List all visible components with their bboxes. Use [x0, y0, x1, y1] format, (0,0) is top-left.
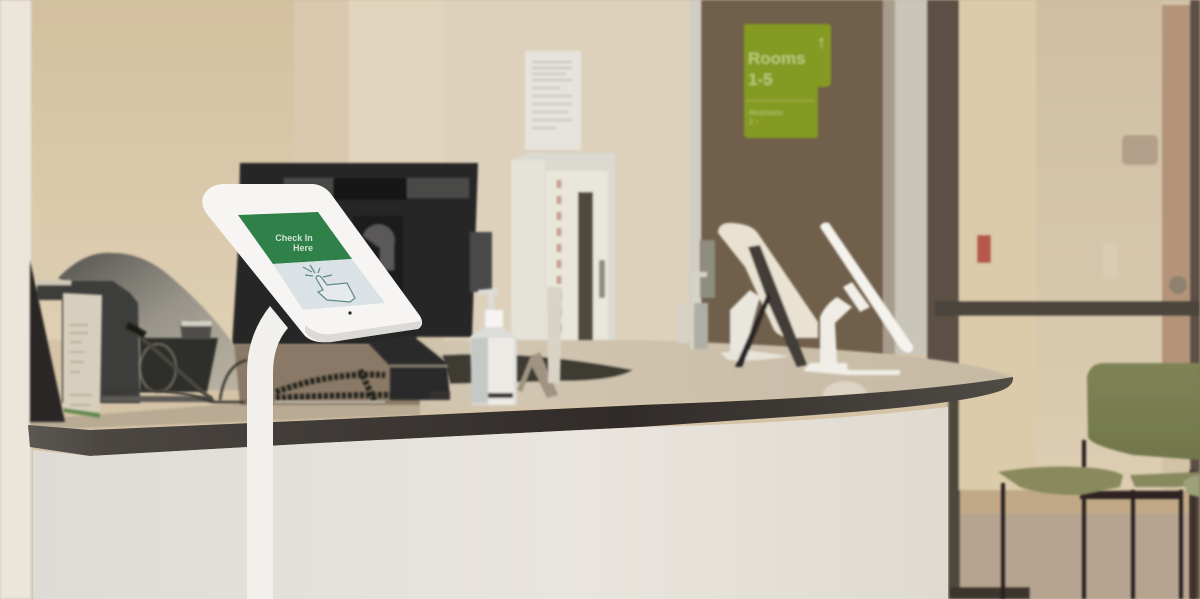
wall sign: Rooms 1-5: Restrooms	[749, 110, 783, 117]
rear kiosk tablet	[718, 223, 818, 338]
background kiosks	[718, 222, 913, 375]
kiosk body	[202, 184, 422, 342]
kiosk screen lower area	[273, 259, 385, 310]
hand tap icon	[303, 265, 355, 302]
brown door wall	[701, 0, 883, 355]
screen text: Check In	[275, 233, 313, 243]
fire extinguisher cabinet	[511, 153, 615, 347]
front kiosk mount	[843, 282, 870, 312]
right room wall	[959, 0, 1036, 490]
office chair back	[58, 253, 247, 390]
posted paper notice	[525, 51, 581, 150]
screen text	[275, 233, 313, 253]
green chair	[998, 363, 1200, 599]
kiosk stand	[247, 306, 288, 599]
screen text: Here	[293, 243, 313, 253]
kiosk camera dot	[348, 311, 352, 315]
front kiosk tablet	[820, 222, 913, 353]
wall sign: Rooms 1-5: 1-5	[748, 70, 773, 89]
clear acrylic sign holder	[547, 287, 562, 383]
small tent desk sign	[517, 352, 558, 398]
desk front panel	[33, 407, 948, 599]
second sanitizer in background	[678, 240, 715, 349]
wall sign: Rooms 1-5	[744, 24, 831, 138]
desk phone	[102, 320, 218, 402]
tangled cables	[103, 325, 392, 402]
wall sign: Rooms 1-5: ↑	[817, 32, 826, 52]
desk edge band	[28, 377, 1013, 456]
rear kiosk arm	[730, 290, 760, 353]
wall sign: Rooms 1-5: Rooms	[748, 49, 806, 68]
hand sanitizer bottle	[470, 288, 517, 405]
desk countertop surface	[30, 340, 1013, 430]
white info card	[63, 293, 102, 418]
wall sign: Rooms 1-5: 2 ↑	[749, 119, 758, 126]
dark glass frame	[927, 0, 959, 370]
kiosk screen green header	[238, 212, 352, 264]
printer and dark panel	[30, 260, 140, 422]
black box	[368, 335, 450, 400]
foreground check-in kiosk	[202, 184, 422, 599]
wall details	[977, 235, 991, 263]
computer monitor	[232, 163, 492, 345]
